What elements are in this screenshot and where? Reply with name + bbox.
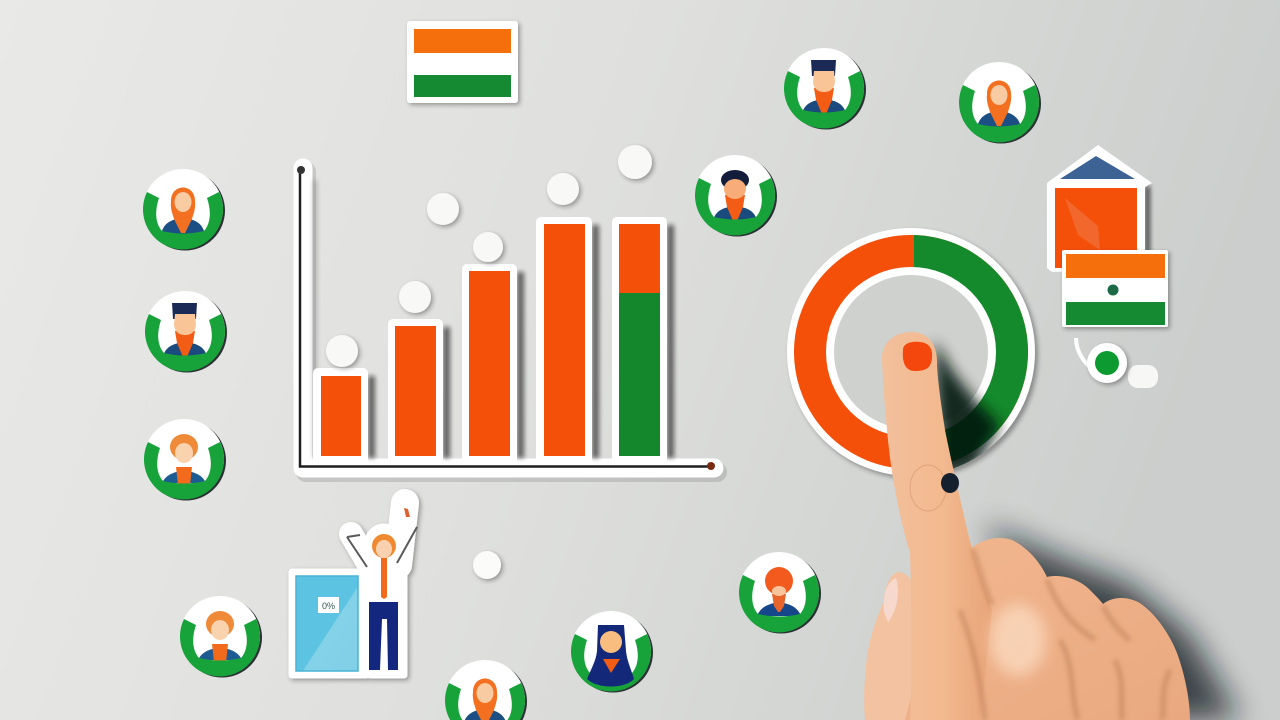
avatar: left top xyxy=(143,169,225,250)
person with ballot: 0% xyxy=(322,601,335,611)
avatar: left middle xyxy=(145,291,227,372)
data dots xyxy=(326,145,652,367)
ink mark xyxy=(941,473,959,493)
thumb xyxy=(864,572,925,720)
finger shadow on donut xyxy=(934,340,1000,480)
ballot box xyxy=(296,576,358,671)
house xyxy=(1047,145,1152,272)
small flag xyxy=(1062,250,1168,327)
chart axes xyxy=(303,168,717,472)
axis line xyxy=(297,166,715,470)
avatar: lower right xyxy=(739,552,821,634)
avatar: bottom centre xyxy=(445,660,527,720)
knuckle circle xyxy=(910,465,946,511)
person xyxy=(347,508,417,670)
bar 2 xyxy=(388,319,450,466)
knuckle shading xyxy=(960,549,1170,720)
donut chart xyxy=(787,228,1038,480)
avatar: bottom left xyxy=(180,596,262,678)
flag top xyxy=(407,21,518,103)
avatar: above chart xyxy=(695,155,777,236)
small dot xyxy=(473,551,501,579)
bar chart xyxy=(297,145,717,472)
hand with inked finger xyxy=(864,332,1190,720)
avatar: left bottom xyxy=(144,419,226,500)
house and flag icon xyxy=(1047,145,1168,388)
palm and knuckles xyxy=(905,538,1190,720)
nail xyxy=(903,342,932,371)
hand shadow xyxy=(985,525,1240,720)
avatar: top right one xyxy=(784,48,866,130)
bar 3 xyxy=(462,264,524,466)
bar 1 xyxy=(313,368,375,466)
person with ballot xyxy=(289,503,417,678)
small green marker xyxy=(1076,338,1098,372)
sticker backing xyxy=(289,503,407,678)
index finger xyxy=(882,332,992,720)
bar 5 xyxy=(612,217,674,466)
avatar: top right two xyxy=(959,62,1041,144)
bar 4 xyxy=(536,217,599,466)
ballot label xyxy=(318,597,339,613)
avatar: bottom middle xyxy=(571,611,653,692)
